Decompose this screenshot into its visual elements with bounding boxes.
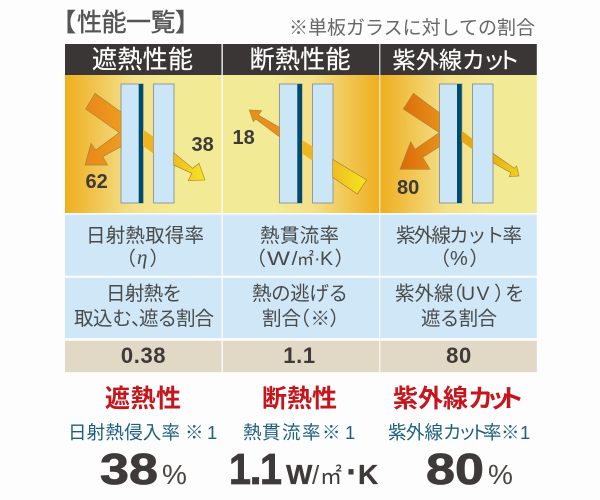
- summary: insulation: W: [286, 459, 313, 490]
- table row: metric names: 熱貫流率: [260, 225, 339, 247]
- table row: metric names: ·: [314, 248, 320, 270]
- table row: descriptions: 割合（※）: [262, 308, 349, 330]
- summary: heat shielding: [68, 385, 217, 494]
- table row: metric names: ㎡: [297, 250, 314, 269]
- summary: insulation: 熱貫流率※1: [243, 422, 355, 443]
- summary: insulation: [229, 385, 378, 494]
- summary: insulation: 断熱性: [262, 385, 337, 413]
- summary: heat shielding: 日射熱侵入率※1: [68, 422, 217, 443]
- table row: metric names: （: [246, 248, 266, 270]
- table row: metric names: （: [430, 248, 450, 270]
- glass panes: [440, 84, 493, 203]
- table row: descriptions: 紫外線（UV）を: [395, 283, 525, 305]
- panel: UV cut diagram: [380, 44, 537, 213]
- summary: heat shielding: 38: [100, 445, 158, 494]
- table row: metric names: %: [450, 248, 468, 270]
- summary: insulation: /: [312, 460, 320, 490]
- table row: metric names: /: [292, 248, 298, 270]
- header: heat shielding: 遮熱性能: [92, 46, 193, 74]
- table row: descriptions: 取込む、遮る割合: [74, 308, 214, 330]
- table row: values: [65, 341, 537, 372]
- summary: insulation: 1: [229, 445, 251, 494]
- table row: descriptions: 日射熱を: [106, 283, 182, 305]
- summary: heat shielding: 遮熱性: [105, 385, 181, 413]
- header: insulation: [223, 44, 379, 75]
- gradient background: [65, 75, 222, 213]
- summary: heat shielding: %: [162, 459, 187, 490]
- table row: descriptions: 熱の逃げる: [252, 283, 348, 305]
- title: 【性能一覧】: [51, 9, 200, 37]
- table row: descriptions: 遮る割合: [421, 308, 497, 330]
- table row: metric names: W: [267, 248, 291, 270]
- table row: metric names: （: [116, 248, 136, 270]
- table row: descriptions: [65, 278, 537, 338]
- table row: metric names: K: [320, 248, 333, 270]
- table row: values: 80: [446, 343, 472, 368]
- summary: UV cut: %: [488, 459, 513, 490]
- arrow: escaping heat 18: [249, 110, 279, 137]
- panel: heat shielding diagram: [65, 44, 222, 213]
- summary: UV cut: 80: [426, 445, 484, 494]
- glass panes: [121, 84, 174, 203]
- summary: insulation: .: [250, 445, 262, 494]
- arrow: transmitted 38: [143, 129, 205, 181]
- summary: insulation: ·: [346, 451, 358, 492]
- note: ※単板ガラスに対しての割合: [289, 17, 535, 39]
- summary: UV cut: [388, 385, 530, 494]
- arrow: incoming heat: [302, 140, 367, 194]
- label 38: 38: [192, 134, 214, 156]
- table row: values: 1.1: [283, 343, 316, 368]
- table row: metric names: 日射熱取得率: [86, 225, 204, 247]
- summary: UV cut: 紫外線カット率※1: [388, 422, 530, 443]
- arrow: UV transmitted: [462, 131, 519, 177]
- header: heat shielding: [65, 44, 222, 75]
- label 80: 80: [397, 177, 419, 199]
- table row: metric names: [65, 215, 537, 276]
- header: UV cut: [380, 44, 537, 75]
- header: UV cut: 紫外線カット: [392, 47, 520, 73]
- arrow: reflected 62: [85, 93, 121, 165]
- arrow: UV blocked 80: [400, 93, 439, 169]
- table row: metric names: ）: [150, 248, 169, 270]
- gradient background: [380, 75, 537, 213]
- summary: insulation: K: [358, 459, 378, 490]
- summary: UV cut: 紫外線カット: [393, 385, 524, 413]
- header: insulation: 断熱性能: [250, 46, 350, 74]
- label 62: 62: [86, 171, 108, 193]
- table row: metric names: ）: [469, 248, 489, 270]
- label 18: 18: [232, 127, 255, 149]
- summary: insulation: ㎡: [320, 464, 342, 489]
- table row: values: 0.38: [121, 343, 166, 368]
- glass panes: [280, 84, 333, 203]
- panel: insulation diagram: [223, 44, 379, 213]
- table row: metric names: ）: [334, 248, 354, 270]
- table row: metric names: 紫外線カット率: [396, 225, 522, 247]
- table row: metric names: η: [137, 245, 147, 269]
- summary: insulation: 1: [260, 445, 282, 494]
- gradient background: [223, 75, 379, 213]
